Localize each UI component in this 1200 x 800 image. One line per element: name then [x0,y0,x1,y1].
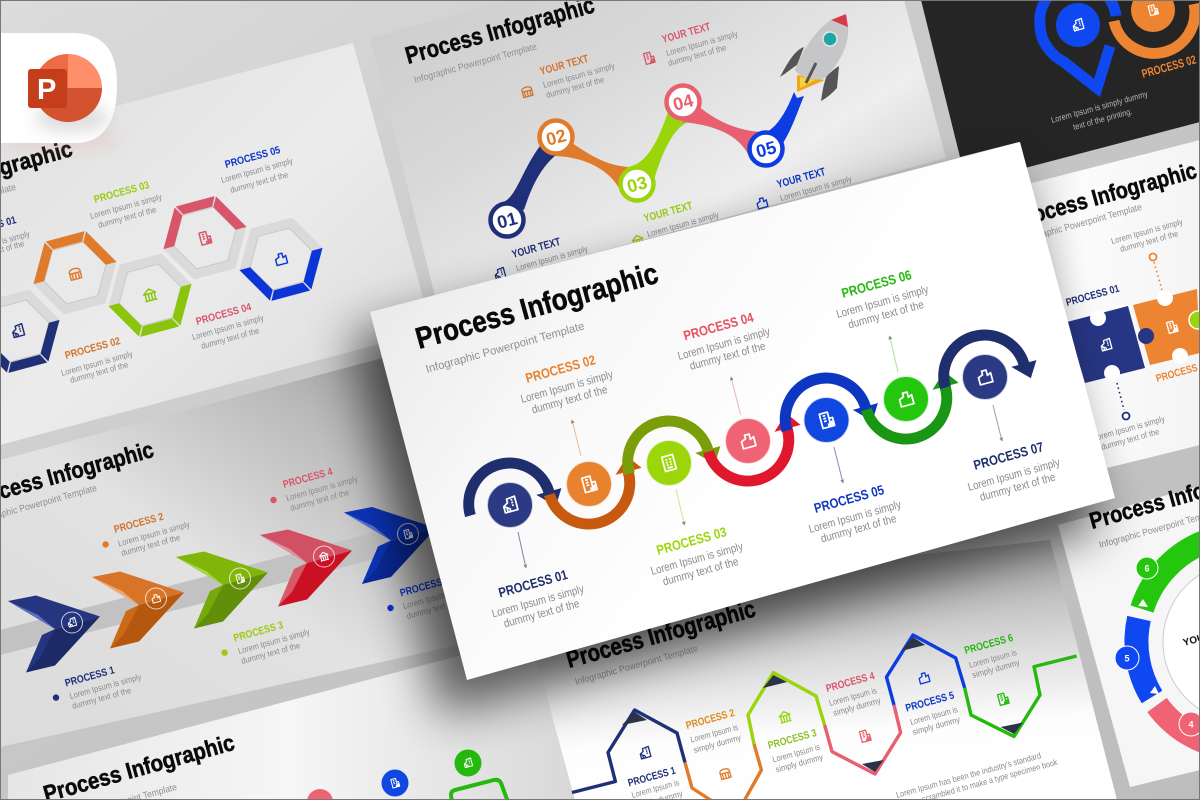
number node 01 [490,204,524,236]
labels: arrows slide: dummy text of the [289,487,351,513]
labels: hexagon slide [0,144,294,385]
labels: zigzag slide: simply dummy [774,752,825,774]
labels: zigzag slide: PROCESS 2 [685,707,736,732]
icon: blue location pin [1040,0,1116,88]
labels: zigzag slide: simply dummy [692,732,743,755]
arrow arc 5 blue [776,365,882,443]
labels: zigzag slide: Lorem Ipsum has been the industry's standard [895,750,1042,800]
ring chart [1115,540,1200,748]
labels: rocket slide: YOUR TEXT [776,166,827,191]
subtitle: rocket slide: Infographic Powerpoint Template [413,41,538,86]
labels: zigzag slide: PROCESS 3 [767,727,818,752]
labels: rocket slide: Lorem Ipsum is simply [515,243,589,273]
icon: PowerPoint badge [0,33,122,152]
ring chart: 4 [1188,720,1194,730]
zigzag corner triangles [622,637,1023,772]
labels: rocket slide: Lorem Ipsum is simply [646,209,720,239]
number node 04: 04 [671,90,695,115]
panel: dark slide [921,0,1200,168]
subtitle: zigzag slide: Infographic Powerpoint Template [574,643,699,688]
labels: hexagon slide: dummy text of the [97,204,158,230]
puzzle piece orange [1133,289,1200,365]
connector lines [518,336,1002,568]
labels: zigzag slide: Lorem Ipsum is [771,742,821,764]
connector: orange dotted line [1150,254,1162,290]
step node 6 [884,377,928,421]
arrow arc 3 olive [619,408,725,486]
text: process 01 [491,567,586,630]
labels: hexagon slide: dummy text of the [229,169,290,195]
labels: arrows slide: Lorem Ipsum is simply [117,519,191,548]
subtitle: main: Infographic Powerpoint Template [425,321,586,376]
step node 4 [726,419,770,463]
labels: arrows slide: dummy text of the [240,640,302,666]
labels: rocket slide: Lorem Ipsum is simply [779,173,853,203]
panel: lower-left slide [8,637,575,800]
chevron 1 navy [8,596,100,672]
panel: circular process slide [1058,458,1200,787]
labels: zigzag slide: Lorem Ipsum is [828,685,878,708]
panel: bottom zigzag slide [520,540,1117,800]
number node 02 [540,120,572,154]
labels: puzzle slide: PROCESS 01 [1065,283,1121,309]
labels: arrows slide [53,466,476,711]
step node 5 [804,398,848,442]
chevron 4 red [260,530,352,606]
body text: dark slide [1050,88,1150,132]
ring chart: 5 [1124,654,1130,664]
number node 01: 01 [495,208,519,233]
text: process 05: Lorem Ipsum is simply [808,499,903,536]
labels: hexagon slide: Lorem Ipsum is simply [89,191,163,221]
step node 3 [647,441,691,485]
labels: rocket slide: YOUR TEXT [539,53,590,78]
labels: arrows slide: Lorem Ipsum is simply [402,581,476,611]
text: process 05: PROCESS 05 [812,482,886,516]
panel: puzzle process slide [1009,140,1200,468]
labels: puzzle slide: dummy text of the [1119,228,1180,254]
body text: dark slide: text of the printing. [1072,106,1133,132]
labels: rocket slide: Lorem Ipsum is simply [665,28,739,58]
arrow arc 6 green [862,368,969,448]
arrow arc 4 red [704,410,811,490]
labels: arrows slide: PROCESS 3 [232,619,285,644]
step node 1 [488,483,532,527]
labels: hexagon slide: dummy text of the [69,359,130,385]
text: process 06: Lorem Ipsum is simply [835,284,930,321]
labels: arrows slide: dummy text of the [71,685,133,711]
text: process 03: Lorem Ipsum is simply [650,541,745,578]
labels: hexagon slide: Lorem Ipsum is simply [60,348,134,378]
text: process 05 [808,482,903,545]
title: main: Process Infographic [412,257,662,356]
text: process 04: dummy text of the [689,340,767,373]
text: process 06: PROCESS 06 [840,267,914,301]
grey band behind arrows [0,518,430,655]
labels: zigzag slide: PROCESS 6 [963,632,1015,657]
zigzag line [572,635,1077,800]
labels: rocket slide: YOUR TEXT [661,21,712,46]
labels: arrows slide: PROCESS 4 [282,466,334,491]
labels: puzzle slide: Lorem Ipsum is simply [1092,413,1166,443]
labels: hexagon slide: PROCESS 04 [195,301,253,328]
text: process 07 [967,439,1062,504]
icon: rocket [780,14,848,101]
labels: arrows slide: Lorem Ipsum is simply [68,671,143,701]
process dots [307,750,508,800]
labels: hexagon slide: Lorem Ipsum is simply [191,312,265,342]
text: process 06 [835,267,930,331]
number node 03 [620,168,654,200]
labels: hexagon slide: PROCESS 05 [224,144,282,171]
labels: zigzag slide: Lorem Ipsum is [909,704,959,727]
labels: arrows slide: Lorem Ipsum is simply [285,473,359,503]
number node 04 [666,86,700,118]
labels: rocket slide: YOUR TEXT [643,200,694,225]
connector: navy dotted line [1117,383,1130,420]
labels: zigzag slide: simply dummy [911,714,962,737]
body text: dark slide: Lorem Ipsum is simply dummy [1050,88,1150,125]
labels: rocket slide [511,21,853,283]
title: zigzag slide: Process Infographic [563,596,759,674]
text: process 06: dummy text of the [847,299,925,331]
labels: rocket slide: dummy text of the [545,74,606,100]
hexagon chain [0,190,332,379]
labels: zigzag slide: simply dummy [832,695,882,718]
labels: puzzle slide [1065,216,1200,452]
ring chart: 6 [1144,564,1150,574]
step node 2 [567,462,611,506]
chevron 3 green [176,552,268,628]
labels: puzzle slide: Lorem Ipsum is simply [1110,216,1184,246]
labels: rocket slide: YOUR TEXT [511,236,562,261]
panel: hexagon process slide [0,43,432,445]
text: process 02: dummy text of the [531,384,609,416]
labels: rocket slide: dummy text of the [667,42,728,68]
step node 7 [963,355,1007,399]
arrow arc 1 navy [460,450,566,528]
text: process 07: Lorem Ipsum is simply [967,457,1062,494]
text: process 07: PROCESS 07 [972,439,1045,473]
arrow arc 7 navy [935,322,1041,400]
text: process 04: PROCESS 04 [682,310,756,343]
panel: rocket process slide [370,0,946,296]
labels: hexagon slide: PROCESS 03 [93,179,151,206]
subtitle: puzzle slide: Infographic Powerpoint Template [1020,202,1143,246]
text: process 04 [677,310,772,373]
number node 05: 05 [754,137,778,162]
zigzag icons [639,672,1009,780]
labels: puzzle slide: dummy text of the [1100,426,1161,452]
text: process 05: dummy text of the [820,513,898,545]
labels: hexagon slide: PROCESS 02 [64,335,122,362]
icon: PowerPoint badge: P [37,74,56,106]
icons: rocket slide [494,51,768,280]
number node 02: 02 [544,125,568,150]
chevron 5 blue [344,507,436,584]
text: process 07: dummy text of the [979,471,1057,504]
labels: zigzag slide: Lorem Ipsum is [630,777,680,800]
text: process 03: dummy text of the [662,556,740,588]
labels: hexagon slide: Lorem Ipsum is simply [220,155,294,185]
labels: arrows slide: dummy text of the [405,595,467,621]
labels: zigzag slide: PROCESS 5 [904,690,956,714]
labels: arrows slide: Lorem Ipsum is simply [237,626,311,656]
text: process 02: PROCESS 02 [524,352,597,386]
text: process 03: PROCESS 03 [655,524,729,558]
text: process 01: dummy text of the [503,598,581,630]
number node 05 [750,132,782,166]
icon: orange location ring [1114,0,1195,53]
labels: zigzag slide [627,632,1059,800]
labels: arrows slide: dummy text of the [120,532,182,558]
panel: arrows process slide [0,348,480,747]
text: process 04: Lorem Ipsum is simply [677,326,772,363]
labels: hexagon slide: dummy text of the [200,325,261,351]
arrow arc 2 orange [545,453,652,533]
chevron 2 orange [92,572,184,648]
labels: zigzag slide: simply dummy [971,657,1021,680]
labels: zigzag slide: Lorem Ipsum is [689,722,739,745]
labels: arrows slide: PROCESS 1 [64,664,116,689]
text: process 02 [520,352,615,416]
number node 03: 03 [625,172,649,197]
labels: zigzag slide: Lorem Ipsum is [968,647,1018,670]
labels: arrows slide: PROCESS 5 [399,574,451,599]
text: process 02: Lorem Ipsum is simply [520,369,615,406]
main card shadow [352,170,1100,715]
panel: main process slide [370,142,1115,680]
puzzle piece navy [1067,306,1145,383]
text: process 03 [650,524,745,588]
text: process 01: PROCESS 01 [497,567,570,600]
labels: rocket slide: Lorem Ipsum is simply [542,60,616,90]
labels: arrows slide: PROCESS 2 [113,511,165,536]
labels: zigzag slide: PROCESS 1 [627,765,677,789]
text: process 01: Lorem Ipsum is simply [491,583,586,620]
labels: zigzag slide: PROCESS 4 [825,670,876,695]
process path connectors [503,92,804,210]
labels: rocket slide: dummy text of the [518,257,579,283]
